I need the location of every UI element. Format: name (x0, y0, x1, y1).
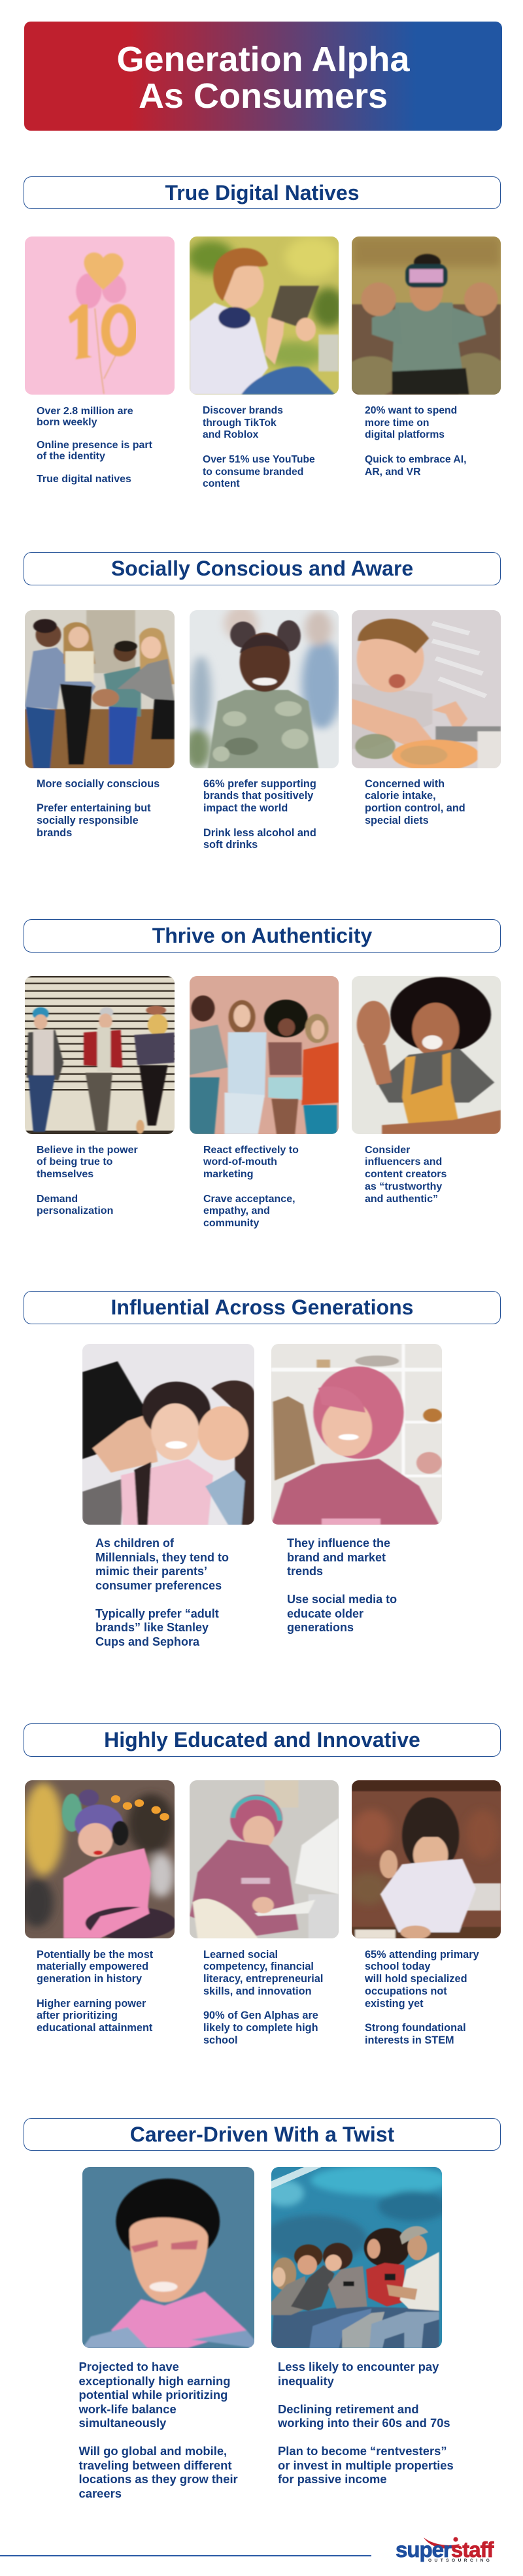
text: diet concerns: calorie intake, (365, 790, 436, 802)
text: earning potential: Will go global and mobile, (78, 2444, 227, 2458)
footer rule (0, 2555, 371, 2556)
text: competency: likely to complete high (203, 2022, 318, 2034)
text: influence trends: trends (287, 1565, 323, 1578)
text: discover brands: Discover brands (203, 405, 283, 416)
text: competency: 90% of Gen Alphas are (203, 2010, 318, 2021)
text: positive brands (203, 777, 316, 851)
text: earning potential: work-life balance (78, 2402, 177, 2416)
text: being true to themselves (37, 1145, 138, 1216)
text: competency: skills, and innovation (203, 1985, 312, 1997)
text: influencers: influencers and (365, 1156, 442, 1167)
photo: woman with colorful braids (25, 1780, 175, 1938)
text: retirement and investing: Declining retirement and (278, 2402, 419, 2416)
text: births and identity: Over 2.8 million are (37, 405, 133, 417)
text: discover brands: Over 51% use YouTube (203, 454, 315, 465)
text: retirement and investing: working into their 60s and 70s (278, 2416, 450, 2430)
logo wordmark: superstaff (396, 2537, 494, 2562)
heading: Career-Driven With a Twist (24, 2118, 501, 2151)
photo: boy with tablet (190, 236, 339, 395)
heading: Highly Educated and Innovative: Highly Educated and Innovative (104, 1728, 420, 1752)
heading: Thrive on Authenticity (24, 919, 501, 953)
text: being true to themselves: themselves (37, 1169, 93, 1180)
panel: Socially Conscious and Aware (24, 552, 501, 851)
text: socially conscious: More socially conscious (37, 777, 160, 789)
text: discover brands: and Roblox (203, 429, 258, 440)
text: word of mouth: marketing (203, 1169, 253, 1180)
text: future occupations: occupations not (365, 1985, 447, 1997)
text: socially conscious (37, 777, 160, 839)
photo: three teens against a striped wall (25, 976, 175, 1134)
heading: Thrive on Authenticity: Thrive on Authenticity (152, 924, 372, 947)
text: influencers (365, 1145, 447, 1205)
photo: kids stacking hands (25, 610, 175, 768)
text: influence trends: Use social media to (287, 1593, 397, 1606)
text: discover brands: through TikTok (203, 417, 277, 429)
text: diet concerns: Concerned with (365, 777, 445, 789)
text: empowered generation: educational attainment (37, 2022, 152, 2034)
text: word of mouth: React effectively to (203, 1145, 299, 1155)
text: competency (203, 1948, 323, 2046)
title banner (24, 22, 502, 131)
text: positive brands: Drink less alcohol and (203, 827, 316, 839)
text: births and identity: born weekly (37, 417, 97, 428)
text: retirement and investing: inequality (278, 2374, 334, 2387)
text: earning potential: careers (78, 2486, 122, 2500)
photo: teen with pink hair (271, 1344, 442, 1525)
text: positive brands: 66% prefer supporting (203, 777, 316, 789)
text: being true to themselves: of being true to (37, 1156, 112, 1167)
heading: Career-Driven With a Twist: Career-Driven With a Twist (130, 2123, 394, 2146)
text: future occupations: will hold specialized (365, 1973, 467, 1985)
text: empowered generation: Higher earning power (37, 1998, 146, 2010)
text: influence trends: educate older (287, 1607, 363, 1620)
logo tagline: OUTSOURCING (428, 2558, 492, 2563)
text: mimic parents: As children of (95, 1537, 174, 1550)
text: word of mouth: empathy, and (203, 1205, 270, 1216)
text: mimic parents: mimic their parents’ (95, 1565, 207, 1578)
heading: True Digital Natives (24, 176, 501, 209)
text: digital platforms: digital platforms (365, 429, 445, 440)
text: retirement and investing: or invest in multiple properties (278, 2458, 454, 2472)
text: digital platforms: Quick to embrace AI, (365, 454, 466, 465)
photo: friends at a brick wall (190, 976, 339, 1134)
panel: Influential Across Generations (24, 1291, 501, 1648)
text: earning potential: locations as they grow their (78, 2472, 238, 2486)
photo: smiling woman in pink hoodie (82, 2167, 254, 2348)
text: empowered generation: after prioritizing (37, 2010, 118, 2021)
text: word of mouth: community (203, 1218, 259, 1229)
text: diet concerns (365, 777, 465, 826)
logo swoosh (394, 2535, 505, 2554)
text: positive brands: brands that positively (203, 790, 313, 802)
text: influencers: content creators (365, 1169, 447, 1180)
heading: Influential Across Generations: Influential Across Generations (111, 1296, 413, 1319)
text: mimic parents: Millennials, they tend to (95, 1551, 229, 1564)
text: influencers: and authentic” (365, 1194, 438, 1205)
text: mimic parents: Cups and Sephora (95, 1635, 199, 1648)
text: empowered generation: materially empowered (37, 1961, 148, 1972)
text: empowered generation: Potentially be the most (37, 1948, 153, 1960)
text: earning potential (78, 2360, 238, 2500)
text: socially conscious: socially responsible (37, 815, 139, 826)
heading: Socially Conscious and Aware: Socially Conscious and Aware (111, 557, 413, 580)
text: positive brands: impact the world (203, 802, 288, 814)
photo: friends on phones (271, 2167, 442, 2348)
text: digital platforms: more time on (365, 417, 429, 429)
text: being true to themselves: personalization (37, 1205, 113, 1216)
text: word of mouth (203, 1145, 299, 1229)
text: retirement and investing: Less likely to encounter pay (278, 2360, 439, 2373)
text: socially conscious: brands (37, 827, 72, 839)
text: word of mouth: Crave acceptance, (203, 1194, 295, 1205)
heading: Socially Conscious and Aware (24, 552, 501, 585)
heading: Highly Educated and Innovative (24, 1723, 501, 1757)
title text: As Consumers (139, 76, 388, 116)
text: discover brands (203, 405, 315, 489)
panel: True Digital Natives (24, 176, 501, 489)
panel: Career-Driven With a Twist (24, 2118, 501, 2500)
text: digital platforms (365, 405, 466, 478)
photo: girl studying at a table (352, 1780, 501, 1938)
title text: Generation Alpha (116, 40, 410, 79)
text: diet concerns: special diets (365, 815, 429, 826)
title text (116, 40, 410, 116)
text: discover brands: content (203, 478, 240, 489)
photo: smiling girl in camo jacket (190, 610, 339, 768)
heading: True Digital Natives: True Digital Natives (165, 181, 359, 204)
text: influence trends: generations (287, 1621, 354, 1634)
text: competency: school (203, 2034, 237, 2046)
text: future occupations: school today (365, 1961, 430, 1972)
heading: Influential Across Generations (24, 1291, 501, 1324)
logo: superstaff outsourcing (396, 2537, 494, 2563)
text: empowered generation: generation in history (37, 1973, 142, 1985)
text: future occupations: interests in STEM (365, 2034, 454, 2046)
text: mimic parents: Typically prefer “adult (95, 1607, 219, 1620)
text: future occupations: 65% attending primary (365, 1948, 479, 1960)
text: future occupations: Strong foundational (365, 2022, 466, 2034)
text: earning potential: Projected to have (78, 2360, 179, 2373)
text: births and identity (37, 405, 152, 485)
text: being true to themselves: Believe in the power (37, 1145, 138, 1155)
text: competency: literacy, entrepreneurial (203, 1973, 323, 1985)
text: socially conscious: Prefer entertaining but (37, 802, 151, 814)
text: empowered generation (37, 1948, 153, 2034)
photo: boy eating at a table (352, 610, 501, 768)
photo: birthday balloons (25, 236, 175, 395)
photo: parents kissing child (82, 1344, 254, 1525)
text: influence trends: They influence the (287, 1537, 390, 1550)
text: earning potential: potential while prioritizing (78, 2388, 228, 2402)
text: future occupations: existing yet (365, 1998, 424, 2010)
panel: Thrive on Authenticity (24, 919, 501, 1229)
text: diet concerns: portion control, and (365, 802, 465, 814)
text: competency: Learned social (203, 1948, 278, 1960)
text: retirement and investing (278, 2360, 454, 2486)
text: word of mouth: word-of-mouth (203, 1156, 277, 1167)
text: influence trends (287, 1537, 397, 1634)
text: earning potential: simultaneously (78, 2416, 166, 2430)
text: digital platforms: AR, and VR (365, 466, 420, 478)
text: mimic parents: brands” like Stanley (95, 1621, 209, 1634)
text: positive brands: soft drinks (203, 839, 258, 851)
text: births and identity: of the identity (37, 451, 105, 462)
text: competency: competency, financial (203, 1961, 314, 1972)
text: influence trends: brand and market (287, 1551, 386, 1564)
photo: student with headphones (190, 1780, 339, 1938)
photo: child in VR headset (352, 236, 501, 395)
text: mimic parents: consumer preferences (95, 1578, 222, 1591)
text: mimic parents (95, 1537, 229, 1648)
text: births and identity: Online presence is part (37, 440, 152, 451)
text: earning potential: exceptionally high earning (78, 2374, 230, 2387)
text: retirement and investing: Plan to become “rentvesters” (278, 2444, 447, 2458)
text: being true to themselves: Demand (37, 1194, 78, 1205)
text: influencers: as “trustworthy (365, 1181, 442, 1192)
text: future occupations (365, 1948, 479, 2046)
text: births and identity: True digital natives (37, 474, 131, 485)
text: retirement and investing: for passive income (278, 2472, 387, 2486)
photo: waving woman with afro (352, 976, 501, 1134)
text: discover brands: to consume branded (203, 466, 303, 478)
text: earning potential: traveling between different (78, 2458, 232, 2472)
text: influencers: Consider (365, 1145, 410, 1155)
panel: Highly Educated and Innovative (24, 1723, 501, 2046)
text: digital platforms: 20% want to spend (365, 405, 457, 416)
